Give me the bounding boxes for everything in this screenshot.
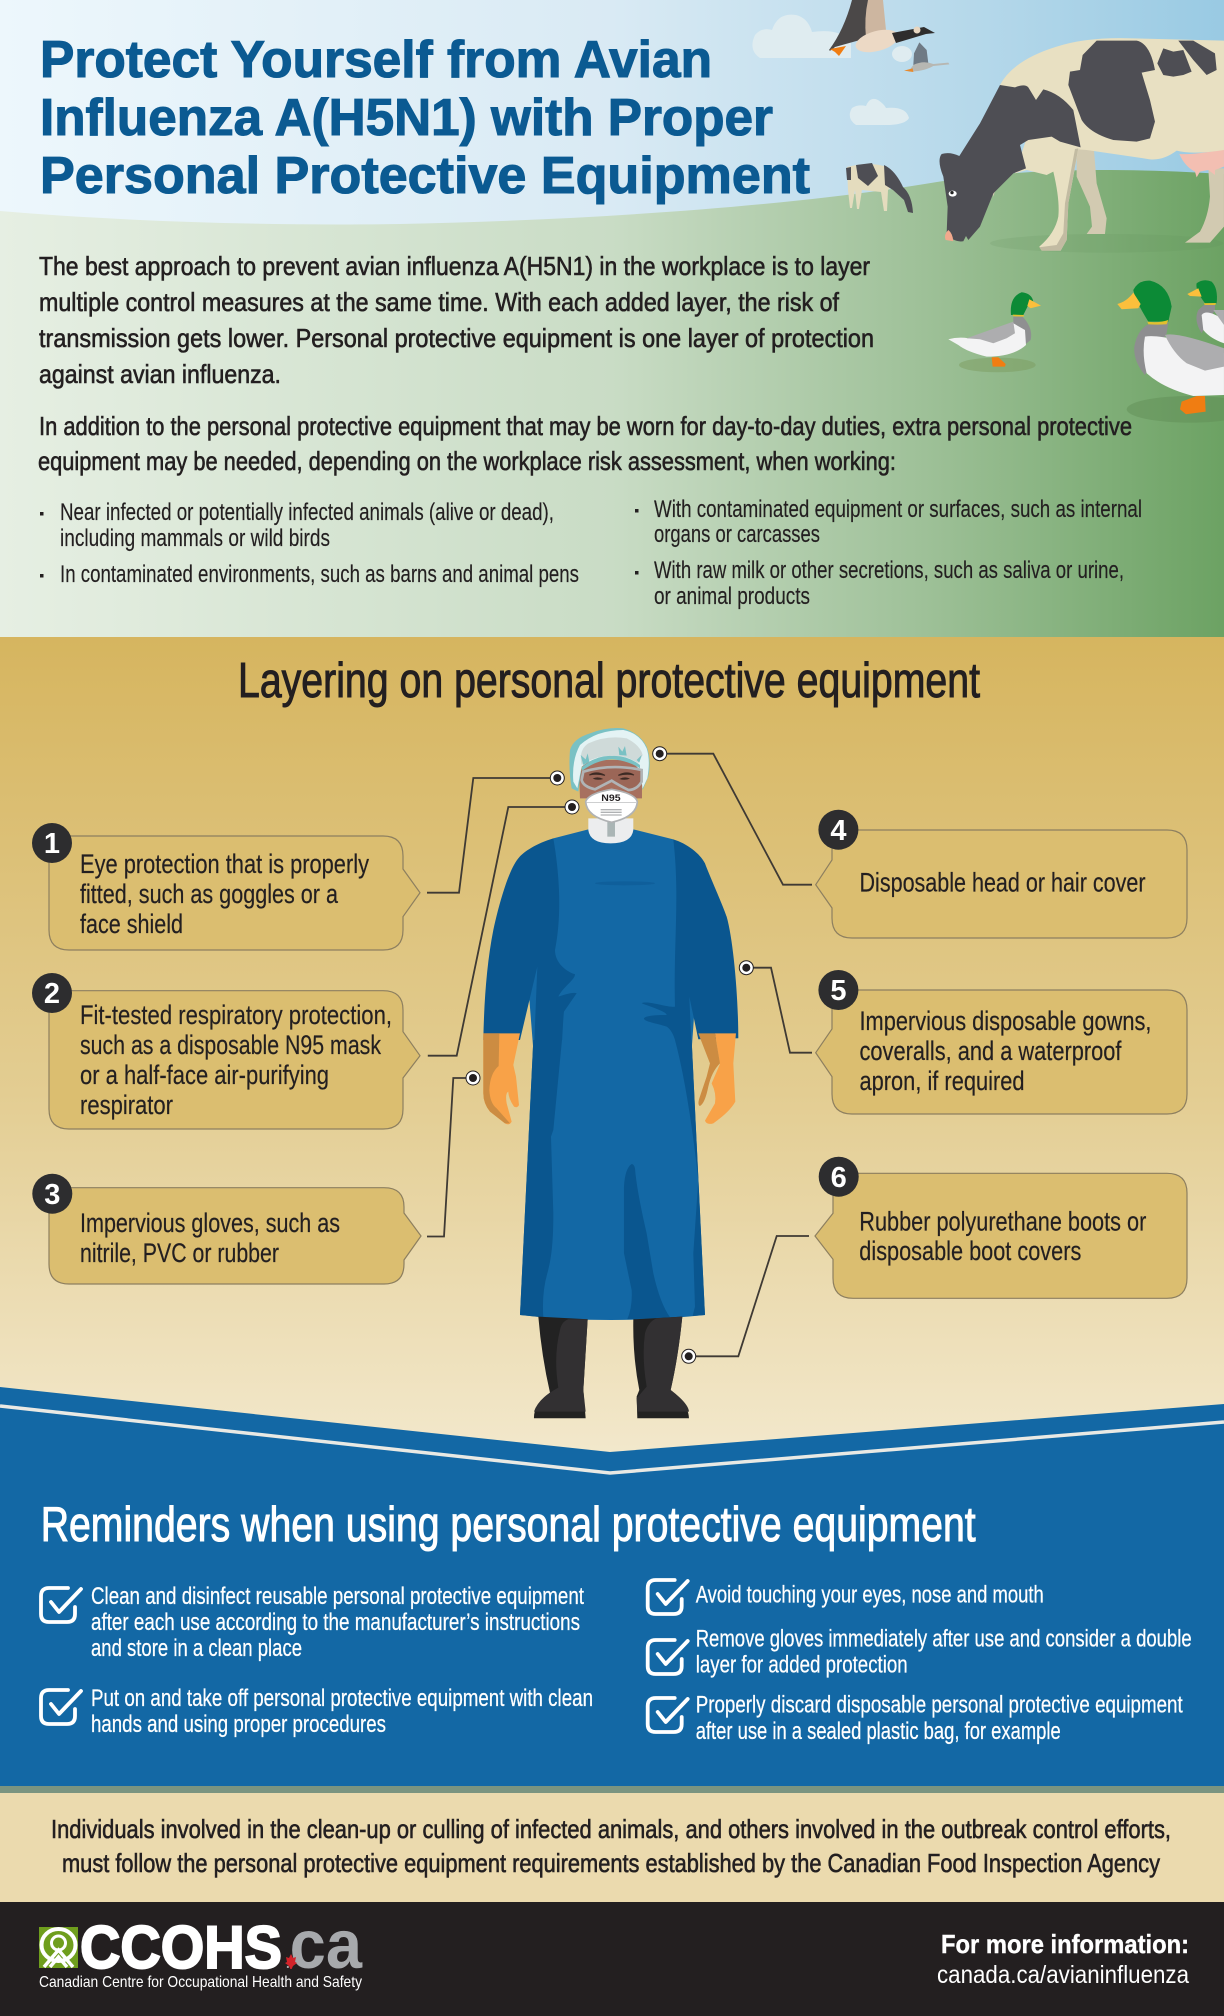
connector: boots (682, 1236, 809, 1363)
connector: eye protection (427, 771, 564, 893)
icon: large mallard duck (1117, 281, 1224, 423)
callout 2: respiratory protection: such as a disposable N95 mask (80, 1030, 381, 1060)
connector: head cover (653, 747, 812, 885)
text block: introduction: transmission gets lower. Personal protective equipment is one layer of protection (39, 323, 874, 353)
callout 6: boots: Rubber polyurethane boots or (859, 1207, 1146, 1237)
reminder: avoid touching: Avoid touching your eyes, nose and mouth (696, 1582, 1044, 1609)
connector: gloves (427, 1071, 480, 1236)
icon: small mallard duck (948, 292, 1041, 372)
panel: reminders background (0, 1387, 1224, 1787)
callout 4: head cover (816, 810, 1187, 938)
panel: notice about culling (0, 1786, 1224, 1902)
reminder: clean and disinfect: Clean and disinfect reusable personal protective equipment (91, 1583, 584, 1610)
reminder: remove gloves: layer for added protection (696, 1652, 908, 1679)
callout 6: boots (815, 1157, 1187, 1298)
logo: CCOHS: .ca (286, 1906, 363, 1983)
logo: CCOHS: Canadian Centre for Occupational Health and Safety (39, 1974, 362, 1991)
icon: small distant cow (846, 163, 913, 213)
panel: layering section background (0, 637, 1224, 1467)
icon: third mallard duck (1187, 280, 1224, 343)
reminder: clean and disinfect: and store in a clean place (91, 1635, 302, 1662)
callout 2: respiratory protection (32, 973, 420, 1129)
callout 1: eye protection (32, 823, 420, 950)
callout 5: gown: 5 (830, 975, 846, 1007)
icon: flying goose (829, 0, 935, 56)
callout 4: head cover: Disposable head or hair cover (860, 868, 1146, 898)
reminder: clean hands: hands and using proper procedures (91, 1711, 386, 1738)
callout 6: boots: 6 (831, 1162, 847, 1194)
connector: gown (739, 961, 812, 1053)
reminder: clean and disinfect: after each use according to the manufacturer’s instructions (91, 1609, 580, 1636)
heading: layering on personal protective equipment: Layering on personal protective equipment (238, 654, 980, 708)
title: Influenza A(H5N1) with Proper (40, 89, 773, 147)
text block: for more information (937, 1929, 1189, 1989)
panel: header landscape background (0, 0, 1224, 637)
callout 2: respiratory protection: respirator (80, 1090, 173, 1120)
callout 3: gloves: Impervious gloves, such as (80, 1208, 340, 1238)
connector: respiratory protection (428, 800, 579, 1056)
callout 3: gloves: nitrile, PVC or rubber (80, 1238, 279, 1268)
reminder: clean hands (41, 1685, 593, 1738)
callout 1: eye protection: face shield (80, 909, 183, 939)
title: Protect Yourself from Avian (40, 31, 712, 89)
callout 1: eye protection: Eye protection that is properly (80, 849, 369, 879)
list: work situations right: organs or carcasses (654, 521, 820, 548)
list: work situations right (635, 496, 1142, 610)
illustration: worker in protective equipment: N95 (601, 793, 621, 803)
reminder: discard (648, 1692, 1183, 1745)
text block: for more information: canada.ca/avianinfluenza (937, 1961, 1189, 1989)
text block: introduction: The best approach to prevent avian influenza A(H5N1) in the workplace is to layer (39, 251, 870, 281)
callout 5: gown (816, 970, 1187, 1114)
callout 2: respiratory protection: Fit-tested respiratory protection, (80, 1000, 392, 1030)
reminder: remove gloves (648, 1626, 1192, 1679)
text block: for more information: For more information: (941, 1929, 1189, 1959)
callout 2: respiratory protection: 2 (44, 978, 60, 1010)
callout 4: head cover: 4 (830, 815, 846, 847)
callout 5: gown: Impervious disposable gowns, (860, 1006, 1152, 1036)
list: work situations left: Near infected or potentially infected animals (alive or dead), (60, 499, 554, 526)
heading: reminders: Reminders when using personal protective equipment (41, 1498, 976, 1552)
icon: large grazing cow (940, 38, 1224, 253)
callout 5: gown: apron, if required (860, 1066, 1024, 1096)
title: Personal Protective Equipment (40, 147, 810, 205)
callout 6: boots: disposable boot covers (859, 1236, 1081, 1266)
callout 1: eye protection: 1 (44, 828, 60, 860)
list: work situations left: In contaminated environments, such as barns and animal pens (60, 561, 579, 588)
panel: footer (0, 1902, 1224, 2016)
illustration: worker in protective equipment (483, 728, 738, 1418)
callout 2: respiratory protection: or a half-face air-purifying (80, 1060, 329, 1090)
list: work situations left: including mammals or wild birds (60, 525, 330, 552)
title (40, 31, 810, 205)
icon: clouds (752, 15, 912, 125)
text block: when extra equipment is needed: equipment may be needed, depending on the workplace risk assessment, when working: (38, 446, 896, 476)
callout 3: gloves (32, 1174, 421, 1284)
list: work situations left (40, 499, 579, 588)
icon: small flying goose (904, 42, 949, 72)
text block: introduction: multiple control measures at the same time. With each added layer, the risk of (39, 287, 840, 317)
logo: CCOHS: CCOHS (80, 1914, 282, 1981)
text block: introduction (39, 251, 874, 389)
callout 3: gloves: 3 (44, 1179, 60, 1211)
reminder: clean and disinfect (41, 1583, 584, 1662)
logo: CCOHS (39, 1906, 363, 1991)
reminder: clean hands: Put on and take off personal protective equipment with clean (91, 1685, 593, 1712)
callout 5: gown: coveralls, and a waterproof (860, 1036, 1122, 1066)
reminder: avoid touching (648, 1580, 1044, 1614)
text block: when extra equipment is needed (38, 411, 1132, 476)
reminder: discard: after use in a sealed plastic bag, for example (696, 1718, 1061, 1745)
text block: introduction: against avian influenza. (39, 359, 281, 389)
list: work situations right: or animal products (654, 583, 810, 610)
callout 1: eye protection: fitted, such as goggles or a (80, 879, 339, 909)
